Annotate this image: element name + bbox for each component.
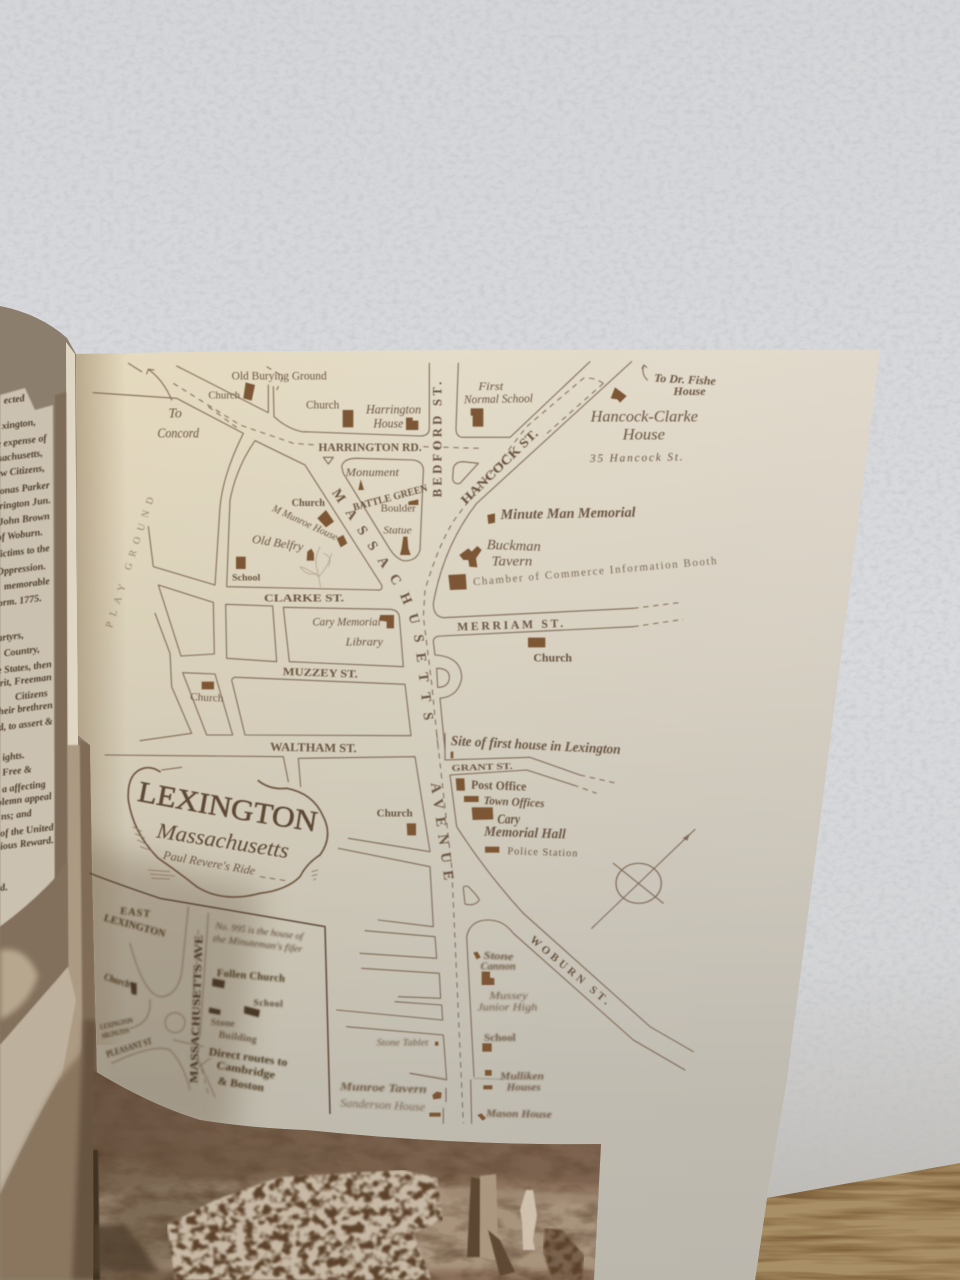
label: To Dr Fishe House: To Dr. Fishe <box>654 372 716 388</box>
label: Battle Green: BATTLE GREEN <box>352 483 429 514</box>
label: Harrington House <box>365 402 421 430</box>
label: Church: Church <box>208 390 240 401</box>
inset label: direct routes <box>208 1046 289 1094</box>
compass rose <box>592 829 695 928</box>
left page inscription: ights. <box>2 750 25 764</box>
label: Massachusetts Avenue upper word: MASSACHUSETTS <box>331 487 434 720</box>
left page text panel <box>0 388 55 927</box>
label: Mussey Junior High <box>477 991 537 1013</box>
label: Mulliken Houses: Mulliken <box>499 1071 544 1082</box>
inset label: Massachusetts Ave: MASSACHUSETTS AVE <box>188 935 206 1083</box>
map: north east section <box>423 362 717 750</box>
left page inscription: memorable <box>3 576 51 593</box>
roads north east <box>423 362 683 750</box>
label: Mussey Junior High: Mussey <box>488 991 528 1002</box>
inset label: Follen Church: Follen Church <box>216 968 285 985</box>
label: Old Belfry: Old Belfry <box>251 532 305 554</box>
label: To Concord: To <box>168 406 182 421</box>
inset label: Pleasant St: PLEASANT ST <box>105 1037 154 1060</box>
label: Buckman Tavern: Tavern <box>492 555 532 570</box>
label: Church: Church <box>377 808 413 819</box>
label: Town Offices: Town Offices <box>483 794 545 810</box>
inset buildings <box>130 978 260 1017</box>
label: Harrington Rd: HARRINGTON RD. <box>318 440 422 454</box>
label: Muzzey St: MUZZEY ST. <box>283 666 358 681</box>
battle photograph at foot of page <box>90 1060 610 1280</box>
inset label: Stone Building: Stone <box>210 1017 236 1030</box>
roads north west <box>93 363 480 741</box>
buildings north east <box>448 387 627 647</box>
spine mark <box>81 625 84 687</box>
label: Statue: Statue <box>383 525 412 536</box>
label: Stone Tablet: Stone Tablet <box>377 1039 429 1049</box>
label: Mulliken Houses: Houses <box>506 1083 541 1094</box>
label: Chamber of Commerce Information Booth: Chamber of Commerce Information Booth <box>473 555 717 588</box>
inset label: road to Lexington: LEXINGTON <box>99 1015 134 1031</box>
label: Post Office: Post Office <box>471 778 527 794</box>
inset label: East Lexington: EAST <box>120 906 151 920</box>
label: Merriam St: MERRIAM ST. <box>457 617 563 634</box>
left page inscription: a affecting <box>1 779 46 795</box>
left page inscription: Free & <box>1 764 33 779</box>
inset label: road to Lexington <box>99 1015 134 1040</box>
photo: dark hill band <box>124 1088 601 1186</box>
inset roads <box>112 907 215 1097</box>
photo: tree trunk <box>467 1177 481 1257</box>
map of Lexington <box>89 360 717 1124</box>
photo: light strip on horizon <box>445 1188 605 1203</box>
label: Mussey Junior High: Junior High <box>477 1002 537 1013</box>
inset label: direct routes: & Boston <box>217 1075 265 1094</box>
title: LEXINGTON: LEXINGTON <box>136 781 319 832</box>
map: south west section <box>89 740 456 1124</box>
wooden table <box>755 1160 960 1280</box>
left page inscription: Citizens <box>14 688 48 703</box>
label: Waltham St: WALTHAM ST. <box>270 740 357 755</box>
left page inscription: Country, <box>3 644 40 659</box>
label: School: School <box>484 1033 516 1044</box>
label: M Munroe House: M Munroe House <box>270 503 339 543</box>
inset label: house of the Minuteman's fifer: the Minuteman's fifer <box>212 933 303 955</box>
label: To Concord <box>157 406 200 442</box>
label: Sanderson House: Sanderson House <box>340 1098 425 1114</box>
label: Cary Memorial Hall: Memorial Hall <box>483 825 566 843</box>
left page inscription: ns; and <box>0 808 33 823</box>
label: Woburn St: WOBURN ST. <box>527 934 612 1007</box>
cartouche shading hatches <box>133 827 318 880</box>
photo: foreground soldiers <box>543 1228 584 1280</box>
left page inscription: ected <box>3 393 26 407</box>
inset label: direct routes: Cambridge <box>215 1059 276 1082</box>
label: Hancock-Clarke House <box>590 408 698 444</box>
label: Minute Man Memorial: Minute Man Memorial <box>499 505 636 523</box>
label: Hancock-Clarke House: House <box>622 427 665 444</box>
label: To Concord: Concord <box>157 427 200 442</box>
roads south west <box>90 755 447 1123</box>
label: Cary Memorial Library: Library <box>345 634 384 648</box>
photo: standing figure <box>520 1190 537 1250</box>
label: Bedford St: BEDFORD ST. <box>431 382 445 497</box>
inset label: house of the Minuteman's fifer: No. 995 is the house of <box>214 921 305 943</box>
roads south east <box>410 733 693 1123</box>
label: Play Ground: PLAY GROUND <box>104 496 157 629</box>
label: To Dr Fishe House: House <box>672 385 706 398</box>
label: Church: Church <box>292 498 325 509</box>
photo: dark left edge trees <box>93 1150 100 1280</box>
label: First Normal School: First <box>477 379 504 393</box>
label: 35 Hancock St: 35 Hancock St. <box>589 451 683 465</box>
left page of open book <box>0 306 97 1280</box>
label: Church: Church <box>190 692 224 705</box>
label: Site of first house in Lexington: Site of first house in Lexington <box>450 734 621 758</box>
inset label: Stone Building <box>210 1017 257 1046</box>
left page cream area <box>0 967 76 1195</box>
label: Stone Cannon: Cannon <box>481 962 516 973</box>
right page of open book <box>70 345 890 1280</box>
buildings south east <box>429 752 499 1121</box>
inset label: house of the Minuteman's fifer <box>212 921 305 955</box>
building: church <box>407 823 416 835</box>
label: Stone Cannon: Stone <box>483 951 514 963</box>
label: Church: Church <box>306 397 339 411</box>
photo: ground <box>90 1181 605 1270</box>
label: Hancock-Clarke House: Hancock-Clarke <box>590 408 698 425</box>
label: Boulder: Boulder <box>381 503 416 514</box>
label: Mulliken Houses <box>499 1071 544 1094</box>
label: First Normal School: Normal School <box>463 391 534 406</box>
arrow to Dr Fishe house <box>642 365 647 380</box>
label: Grant St: GRANT ST. <box>451 761 513 773</box>
inset map: East Lexington <box>99 906 305 1097</box>
inset label: Church: Church <box>102 972 132 991</box>
label: Clarke St: CLARKE ST. <box>264 593 344 605</box>
label: Old Burying Ground: Old Burying Ground <box>232 370 327 382</box>
label: Cary Memorial Hall <box>483 812 566 843</box>
map: north west section <box>92 362 480 757</box>
left page inscription <box>0 393 55 894</box>
subtitle: Massachusetts: Massachusetts <box>154 817 291 863</box>
inset label: Stone Building: Building <box>218 1029 257 1046</box>
left page inscription: of the United <box>0 822 55 840</box>
label: Avenue: AVENUE <box>427 782 456 881</box>
label: First Normal School <box>463 379 534 406</box>
map: south east section <box>410 733 695 1123</box>
inset label: direct routes: Direct routes to <box>208 1046 289 1069</box>
label: Harrington House: House <box>372 416 404 430</box>
left page brown corner <box>0 1040 97 1280</box>
label: Cary Memorial Library <box>312 614 384 648</box>
title cartouche: Lexington Massachusetts <box>126 766 330 898</box>
label: Buckman Tavern <box>487 538 541 570</box>
label: Monument: Monument <box>345 467 400 479</box>
label: Police Station: Police Station <box>507 846 578 859</box>
photo: column of soldiers <box>167 1170 443 1280</box>
label: Munroe Tavern: Munroe Tavern <box>339 1079 427 1096</box>
inset label: road to Lexington: ARLINGTON <box>101 1026 131 1040</box>
label: Hancock St: HANCOCK ST. <box>458 426 541 507</box>
lower right labels, faded by page curve <box>477 951 552 1121</box>
inset label: School: School <box>253 998 283 1010</box>
left page strip near spine <box>66 342 80 1000</box>
label: To Dr Fishe House <box>654 372 716 398</box>
label: Buckman Tavern: Buckman <box>487 538 541 555</box>
inset label: East Lexington: LEXINGTON <box>103 913 167 940</box>
subtitle: Paul Revere's Ride: Paul Revere's Ride <box>161 848 257 878</box>
icon: old belfry tree <box>300 547 332 587</box>
label: Stone Cannon <box>481 951 516 973</box>
buildings north west <box>202 382 418 689</box>
label: Cary Memorial Hall: Cary <box>497 812 521 827</box>
label: Harrington House: Harrington <box>365 402 421 416</box>
left page inscription: xington, <box>0 417 36 432</box>
label: Church: Church <box>533 651 573 664</box>
left page brown border strip <box>55 392 68 967</box>
label: Mason House: Mason House <box>485 1109 552 1121</box>
label: School: School <box>232 573 261 584</box>
label: Cary Memorial Library: Cary Memorial <box>312 614 381 628</box>
left page lower picture <box>0 860 97 1280</box>
arrow to Concord <box>147 369 172 400</box>
